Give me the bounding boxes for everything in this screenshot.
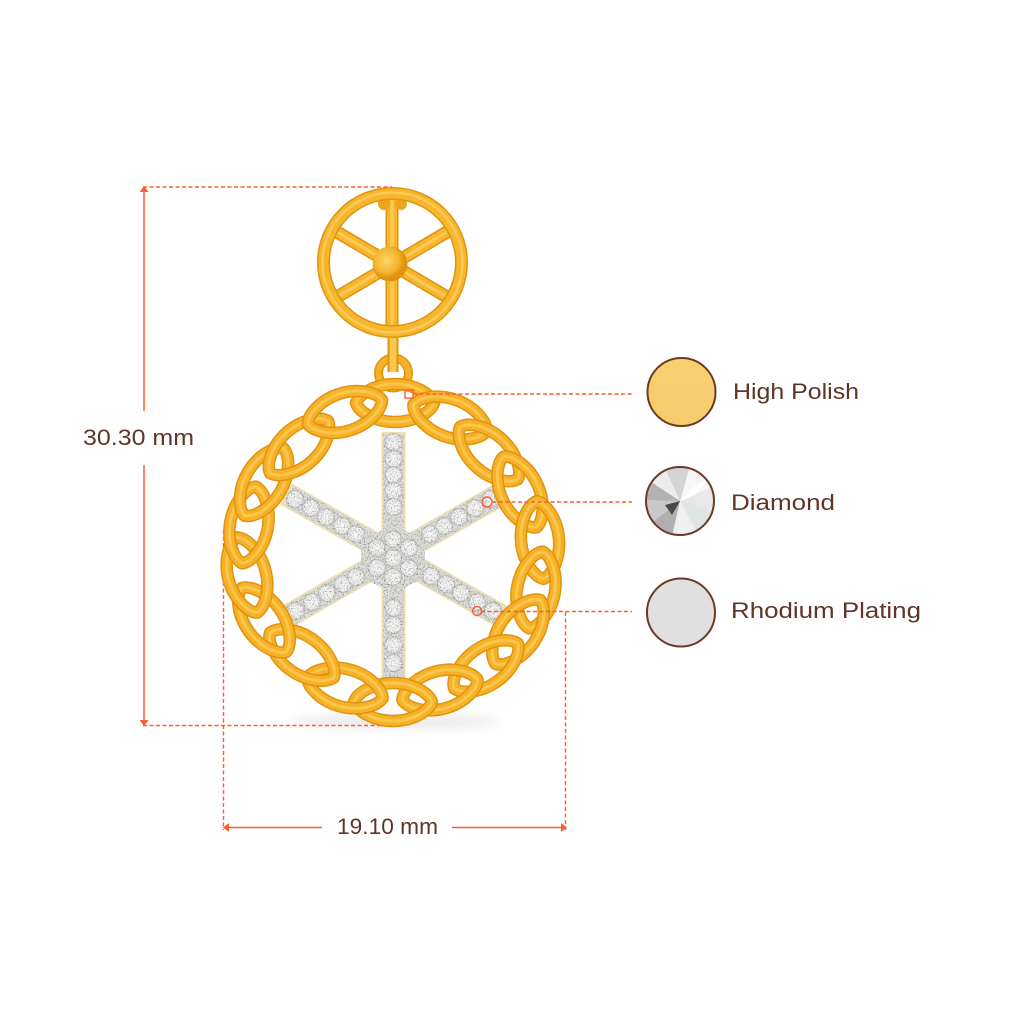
leader lines [405,390,632,616]
dimension: height guides and arrow [140,186,400,726]
swatch: rhodium plating [647,578,715,646]
outer ring [324,194,462,332]
gold curb chain ring [219,382,562,721]
spokes [337,200,447,325]
label: high polish: High Polish [733,379,859,404]
label: width: 19.10 mm [337,814,438,839]
label: height: 30.30 mm [83,425,194,450]
swatch: high polish [648,358,716,426]
earring top: wheel stud [322,192,462,332]
label: rhodium plating: Rhodium Plating [731,598,921,623]
swatch: diamond [646,466,715,536]
dimension: width guides and arrow [223,530,567,832]
diamond wheel [286,432,502,681]
stones: arms [286,490,502,620]
pave stones with sparkle texture [286,433,502,679]
ground shadow [290,716,500,728]
bail connector [378,338,408,388]
clip bumps [378,198,407,210]
hub [372,246,408,282]
label: diamond: Diamond [731,490,835,515]
metal arms [286,432,501,681]
stones: vertical [384,433,402,672]
stones: centre cluster [368,530,418,586]
